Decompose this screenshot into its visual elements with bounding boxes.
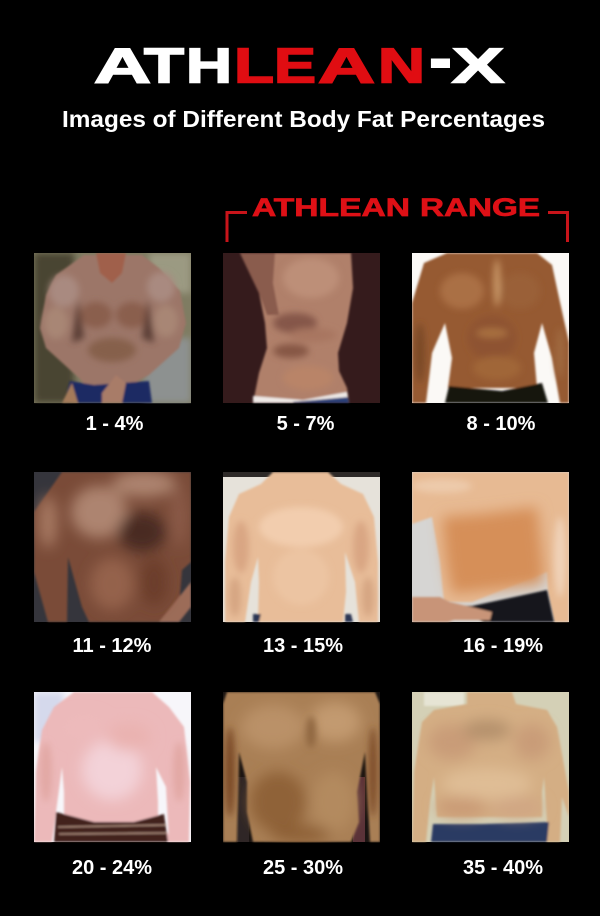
photo: 20-24% physique [34,692,191,842]
athlean range bracket and heading: ATHLEAN [252,194,410,222]
logo: ATHLEAN-X: N [378,40,425,94]
logo: ATHLEAN-X: H [186,40,232,94]
label: 16-19%: 16 - 19% [463,635,543,657]
photo: 8-10% physique [412,253,569,403]
logo: ATHLEAN-X: T [144,40,184,94]
label: 25-30%: 25 - 30% [263,857,343,879]
label: 13-15%: 13 - 15% [263,635,343,657]
athlean range bracket and heading [227,194,568,242]
logo: ATHLEAN-X: A [318,40,375,94]
photo: 13-15% physique [223,472,380,622]
photo: 11-12% physique [34,471,191,622]
title: Images of Different Body Fat Percentages [62,106,545,132]
photo: 16-19% physique [412,472,569,622]
label: 5-7%: 5 - 7% [277,413,335,435]
logo: ATHLEAN-X: - [428,12,453,101]
label: 1-4%: 1 - 4% [86,413,144,435]
athlean range bracket and heading: RANGE [420,194,540,222]
label: 8-10%: 8 - 10% [467,413,536,435]
label: 20-24%: 20 - 24% [72,857,152,879]
photo: 25-30% physique [223,692,380,842]
logo: ATHLEAN-X: X [452,40,504,94]
photo: 1-4% physique [34,253,191,403]
label: 11-12%: 11 - 12% [73,635,152,657]
logo: ATHLEAN-X: L [234,40,274,94]
logo: ATHLEAN-X: A [94,40,151,94]
label: 35-40%: 35 - 40% [463,857,543,879]
photo: 5-7% physique [223,253,380,403]
logo: ATHLEAN-X [94,12,504,101]
photo: 35-40% physique [412,692,569,842]
logo: ATHLEAN-X: E [274,40,316,94]
